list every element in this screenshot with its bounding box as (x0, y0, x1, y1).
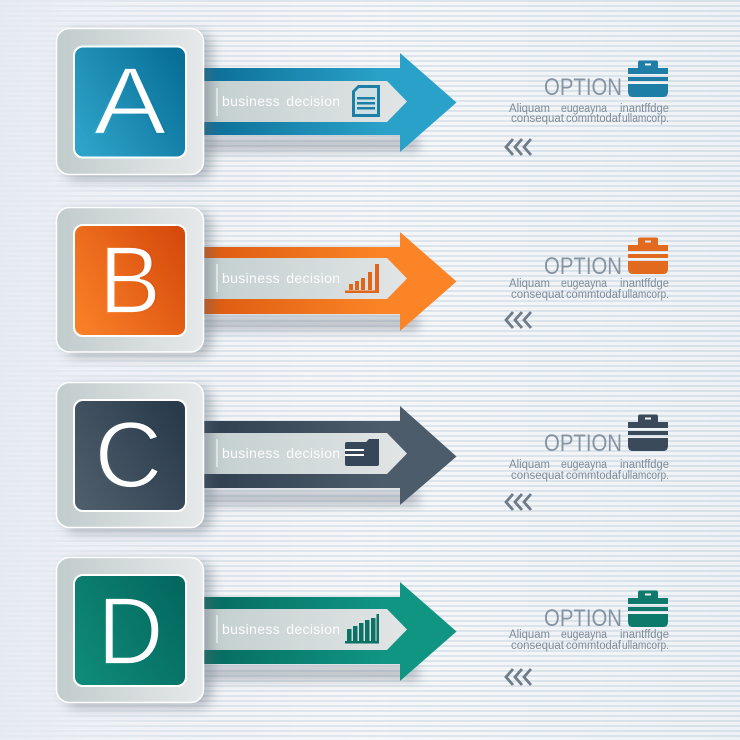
heading: option: OPTION (544, 430, 622, 457)
description text: commtodaf (566, 640, 622, 652)
icon: briefcase (628, 238, 668, 274)
description text (509, 459, 669, 482)
arrow B (204, 232, 456, 331)
arrow C (204, 406, 456, 506)
description text: commtodaf (566, 113, 622, 125)
icon: bar chart (345, 614, 379, 644)
letter D: D (98, 578, 164, 685)
label: business decision: business decision (222, 621, 340, 637)
letter A: A (94, 48, 166, 155)
description text: inantffdge (620, 629, 669, 641)
label: business decision (216, 88, 340, 116)
description text: Aliquam (509, 629, 550, 641)
icon: briefcase (628, 590, 668, 627)
description text: inantffdge (620, 278, 669, 290)
description text: ullamcorp. (622, 289, 669, 301)
panel: option A (56, 28, 669, 180)
panel: option C (56, 382, 669, 533)
description text (509, 278, 669, 301)
card D (56, 558, 212, 708)
heading: option: OPTION (544, 253, 622, 280)
description text: consequat (511, 640, 565, 652)
label: business decision (216, 615, 340, 643)
label: business decision: business decision (222, 445, 340, 461)
chevrons (506, 312, 531, 328)
description text (509, 103, 669, 125)
description text: ullamcorp. (622, 470, 669, 482)
letter C: C (95, 402, 162, 507)
description text: consequat (511, 113, 565, 125)
description text: commtodaf (566, 289, 622, 301)
description text: commtodaf (566, 470, 622, 482)
description text: ullamcorp. (622, 640, 669, 652)
description text: inantffdge (620, 459, 669, 471)
card B (56, 208, 212, 357)
description text: eugeayna (561, 629, 608, 641)
arrow A (204, 53, 456, 152)
label: business decision: business decision (222, 93, 340, 109)
description text: eugeayna (561, 103, 608, 115)
panel: option D (56, 558, 669, 708)
icon: briefcase (628, 414, 668, 451)
chevrons (506, 139, 531, 155)
heading: option: OPTION (544, 74, 622, 101)
chevrons (506, 669, 531, 685)
description text: Aliquam (509, 459, 550, 471)
panel: option B (56, 208, 669, 357)
description text: consequat (511, 289, 565, 301)
icon: briefcase (628, 60, 668, 97)
card C (56, 382, 212, 533)
icon: document (352, 85, 380, 117)
label: business decision (216, 439, 340, 467)
description text: Aliquam (509, 278, 550, 290)
description text: inantffdge (620, 103, 669, 115)
label: business decision: business decision (222, 270, 340, 286)
description text: Aliquam (509, 103, 550, 115)
description text: consequat (511, 470, 565, 482)
icon: folder (345, 439, 379, 466)
description text: eugeayna (561, 278, 608, 290)
arrow D (204, 582, 456, 681)
heading: option: OPTION (544, 605, 622, 632)
description text: eugeayna (561, 459, 608, 471)
description text (509, 629, 669, 652)
chevrons (506, 494, 531, 510)
letter B: B (99, 227, 161, 334)
label: business decision (216, 264, 340, 292)
icon: rising bar chart (345, 264, 379, 293)
card A (56, 28, 212, 180)
description text: ullamcorp. (622, 113, 669, 125)
